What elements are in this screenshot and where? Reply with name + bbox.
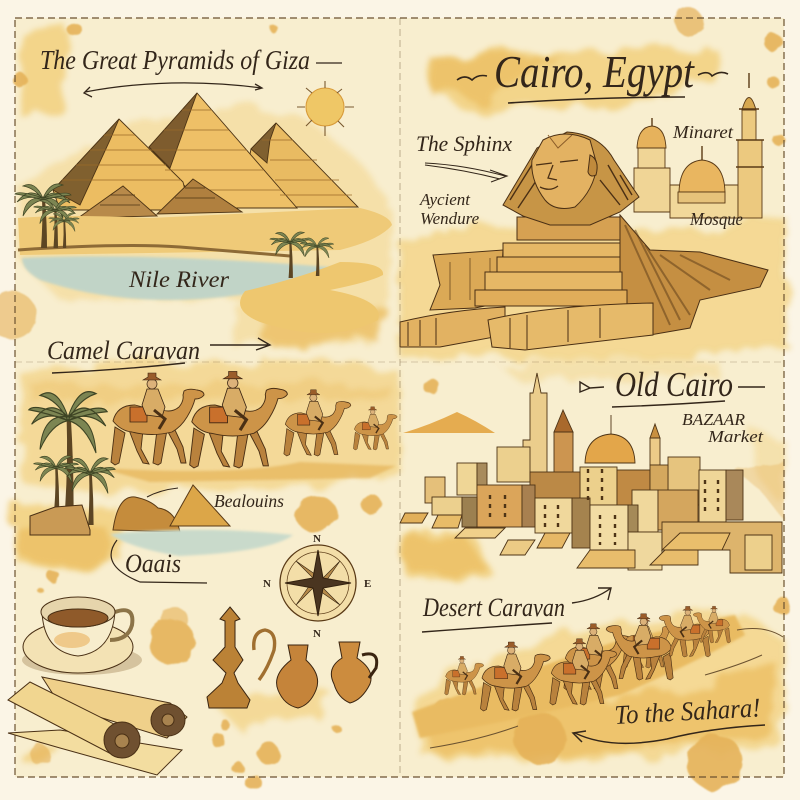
panel: sphinx [400, 73, 768, 350]
label: to the Sahara: To the Sahara! [614, 692, 761, 730]
arrow: desert direction and underline [422, 588, 611, 632]
panel: coffee and antiques [8, 597, 377, 775]
title: Cairo, Egypt [494, 46, 695, 97]
label: Nile River: Nile River [128, 267, 230, 292]
arrow: to sphinx [425, 163, 507, 182]
icon: hook [254, 630, 275, 680]
icon: clay jar one [277, 645, 318, 708]
icon: compass rose: E [364, 578, 371, 590]
arrow: to Sahara [573, 725, 765, 743]
nile river [22, 256, 340, 300]
trail lines [430, 629, 783, 748]
icon: scrolls [8, 677, 187, 775]
label: Bedouins: Bealouins [214, 491, 284, 511]
mosque [634, 73, 764, 218]
oasis curve arrow [111, 540, 207, 583]
sphinx figure [400, 132, 768, 350]
arrow: caravan direction and underline [52, 338, 270, 373]
label: The Sphinx: The Sphinx [416, 131, 512, 156]
icon: clay jar two [331, 642, 377, 703]
icon: coffee cup [22, 597, 142, 675]
icon: compass rose [263, 533, 371, 640]
sand bank [18, 208, 392, 255]
oasis rocks and tent [113, 485, 230, 532]
label: Ancient Wendure: Aycient [419, 190, 471, 209]
icon: sun [297, 81, 354, 136]
panel: camel caravan [29, 336, 397, 583]
decorative birds and underline [457, 72, 728, 103]
ground shadow [100, 462, 396, 482]
camels train [445, 606, 730, 711]
swoosh [147, 488, 178, 497]
label: Mosque: Mosque [689, 209, 743, 229]
label: Oasis: Oaais [125, 549, 181, 578]
camels [111, 371, 397, 468]
heading: camel caravan: Camel Caravan [47, 336, 200, 365]
palms [15, 184, 334, 278]
label: Ancient Wendure: Wendure [420, 209, 480, 228]
panel: old Cairo [400, 365, 782, 573]
heading: desert caravan: Desert Caravan [422, 593, 565, 622]
label: bazaar market: BAZAAR [682, 410, 746, 429]
icon: compass rose: N [313, 533, 321, 545]
icon: compass rose: N [263, 578, 271, 590]
underline and dashes [580, 382, 765, 407]
icon: genie lamp [207, 607, 250, 708]
river bank edge [18, 246, 290, 256]
distant hill [403, 412, 495, 433]
icon: compass rose: N [313, 628, 321, 640]
heading: pyramids: The Great Pyramids of Giza [40, 45, 310, 75]
dune [412, 615, 745, 738]
south bank [240, 262, 383, 333]
city buildings [400, 373, 782, 573]
oasis water [110, 530, 293, 556]
heading: Old Cairo: Old Cairo [615, 365, 733, 404]
panel: great pyramids of Giza [15, 45, 392, 333]
palms and hut [29, 392, 115, 535]
label: bazaar market: Market [707, 427, 764, 446]
panel: desert caravan [412, 588, 783, 748]
label: Minaret: Minaret [672, 122, 734, 142]
chart: pyramids drawing [53, 93, 358, 218]
arrow: heading underline [84, 63, 342, 97]
